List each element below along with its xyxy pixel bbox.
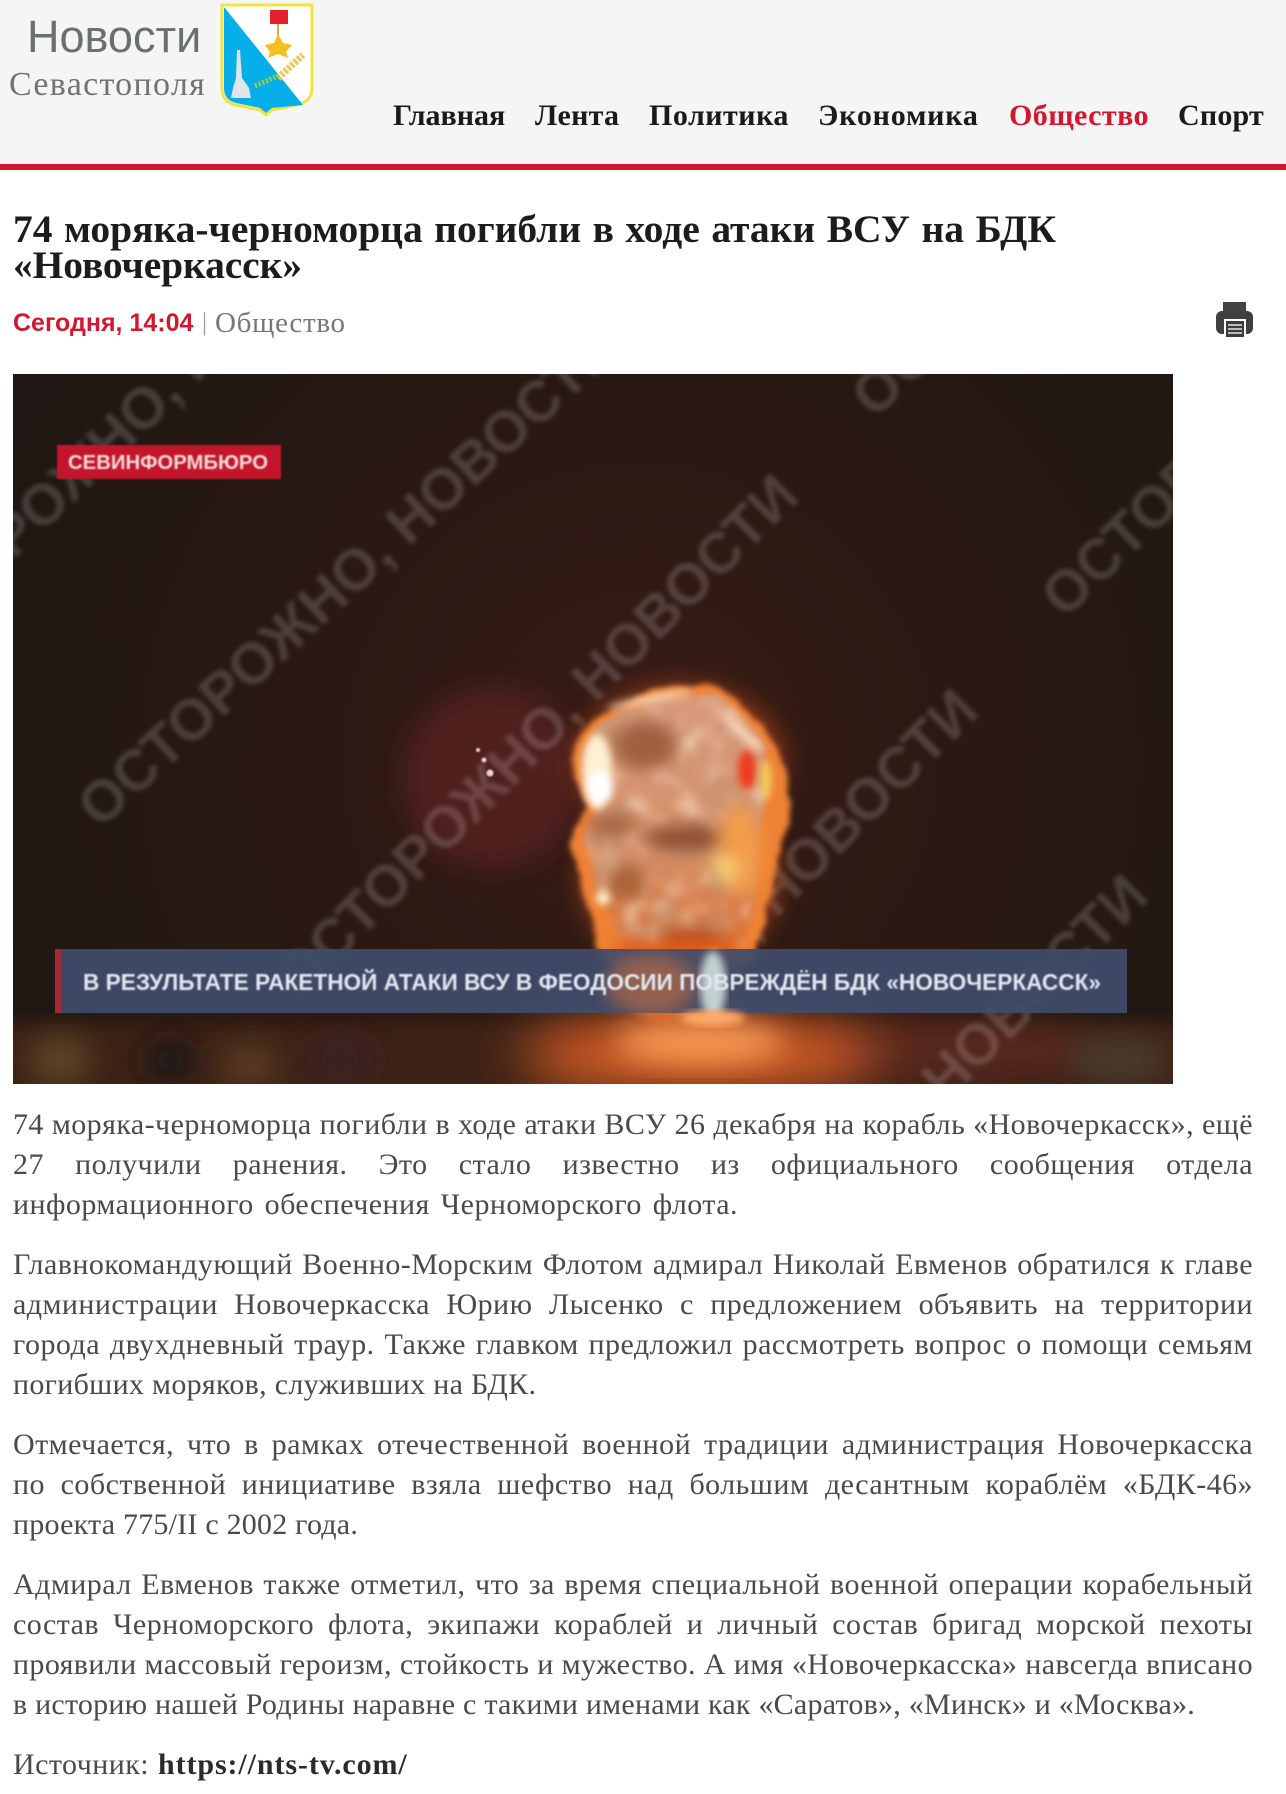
paragraph 3 [13, 1428, 1253, 1541]
paragraph 4: состав Черноморского флота, экипажи кораблей и личный состав бригад морской пехоты [13, 1608, 1253, 1641]
dark red halo [402, 688, 582, 868]
article meta: date and category [13, 307, 346, 339]
paragraph 2 [13, 1248, 1253, 1401]
nav item: Экономика [818, 99, 979, 132]
source label: Источник: [13, 1748, 149, 1781]
article title: 74 моряка-черноморца погибли в ходе атаки ВСУ на БДК [13, 207, 1056, 251]
paragraph 1 [13, 1108, 1253, 1221]
icon: printer [1216, 302, 1253, 337]
fireball outer glow [580, 688, 780, 965]
watermarks: ОСТОРОЖНО, НОВОСТИ [263, 462, 810, 1009]
fireball mottled texture [584, 700, 768, 949]
paragraph 4: в историю нашей Родины наравне с такими именами как «Саратов», «Минск» и «Москва». [13, 1688, 1195, 1721]
paragraph 1: информационного обеспечения Черноморского флота. [13, 1188, 738, 1221]
paragraph 2: погибших моряков, служивших на БДК. [13, 1368, 536, 1401]
paragraph 4 [13, 1568, 1253, 1721]
paragraph 3: Отмечается, что в рамках отечественной военной традиции администрация Новочеркасска [13, 1428, 1253, 1461]
paragraph 1: 74 моряка-черноморца погибли в ходе атаки ВСУ 26 декабря на корабль «Новочеркасск», ещё [13, 1108, 1253, 1141]
paragraph 2: Главнокомандующий Военно-Морским Флотом адмирал Николай Евменов обратился к главе [13, 1248, 1253, 1281]
nav item active: Общество [1009, 99, 1149, 132]
watermarks [13, 374, 1173, 949]
lower third text: В РЕЗУЛЬТАТЕ РАКЕТНОЙ АТАКИ ВСУ В ФЕОДОСИИ ПОВРЕЖДЁН БДК «НОВОЧЕРКАССК» [83, 968, 1101, 995]
separator: | [202, 309, 207, 336]
news photo: explosion at night: СЕВИНФОРМБЮРО [68, 452, 268, 474]
news photo: explosion at night [13, 374, 1173, 1084]
article title: «Новочеркасск» [13, 243, 302, 287]
nav item: Лента [535, 99, 619, 132]
sparks [476, 748, 494, 776]
paragraph 1: 27 получили ранения. Это стало известно из официального сообщения отдела [13, 1148, 1253, 1181]
navigation menu [393, 99, 1264, 132]
nav item: Спорт [1178, 99, 1264, 132]
category: Общество [215, 307, 346, 339]
paragraph 4: Адмирал Евменов также отметил, что за время специальной военной операции корабельный [13, 1568, 1253, 1601]
paragraph 3: по собственной инициативе взяла шефство над большим десантным кораблём «БДК-46» [13, 1468, 1253, 1501]
icon: Sevastopol coat of arms [220, 4, 314, 117]
fireball body [572, 686, 788, 965]
paragraph 3: проекта 775/II с 2002 года. [13, 1508, 358, 1541]
source line [13, 1748, 408, 1781]
nav item: Главная [393, 99, 505, 132]
ground band [13, 1013, 1173, 1084]
fireball dark patches [588, 720, 760, 963]
source badge [57, 445, 281, 479]
source link: https://nts-tv.com/ [158, 1748, 408, 1781]
paragraph 2: города двухдневный траур. Также главком предложил рассмотреть вопрос о помощи семьям [13, 1328, 1253, 1361]
nav item: Политика [649, 99, 789, 132]
date: Сегодня, 14:04 [13, 309, 193, 337]
article title [13, 207, 1056, 287]
paragraph 2: администрации Новочеркасска Юрию Лысенко с предложением объявить на территории [13, 1288, 1253, 1321]
article body [13, 1108, 1253, 1781]
fire column bottom [612, 940, 740, 1030]
header bar [0, 0, 1286, 170]
lower third bar [61, 949, 1127, 1013]
paragraph 4: проявили массовый героизм, стойкость и мужество. А имя «Новочеркасска» навсегда вписано [13, 1648, 1253, 1681]
header red rule [0, 164, 1286, 170]
logo text: Севастополя: Севастополя [9, 66, 206, 103]
fireball highlights [582, 686, 771, 905]
logo text: Новости: Новости [27, 11, 201, 62]
